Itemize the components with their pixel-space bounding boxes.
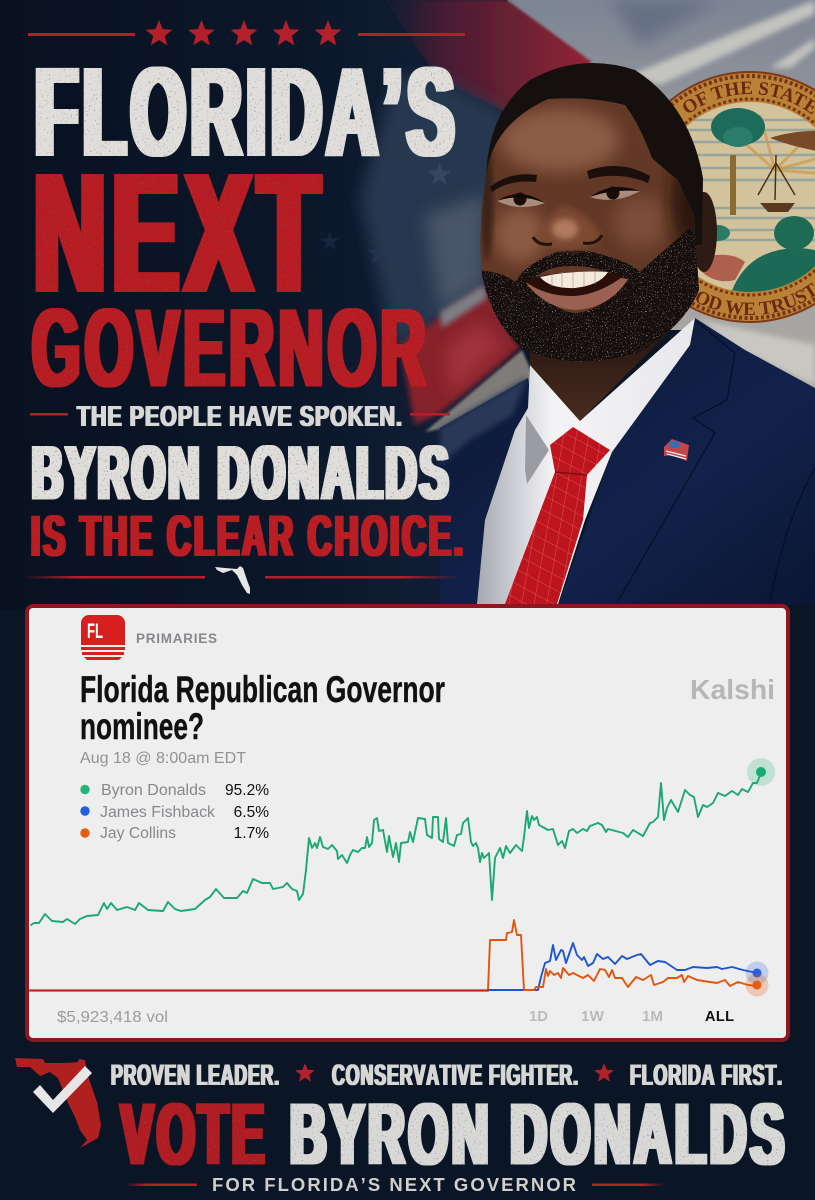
time range tabs [529,1009,734,1025]
top rule with five stars [28,20,465,45]
divider with Florida icon [22,566,460,594]
left jacket highlight [440,377,528,465]
collar left shadow [525,415,549,484]
decorative faint stars in navy field [318,156,454,271]
subhead with flanking rules: THE PEOPLE HAVE SPOKEN. [77,401,403,433]
vote headline: VOTE [121,1086,268,1183]
decorative faint stars in navy field: ★ [425,156,454,192]
series: James Fishback [488,943,757,990]
beard [482,227,699,362]
headline [31,42,466,569]
necktie [505,427,610,604]
slogan row: PROVEN LEADER. [111,1059,280,1092]
slogan row [111,1059,783,1092]
series: Jay Collins [488,920,757,990]
legend: Jay Collins [100,825,176,842]
seal scene [688,108,815,292]
end marker: Collins [746,974,768,996]
Kalshi wordmark: Kalshi [690,674,775,705]
candidate name: BYRON DONALDS [32,431,452,516]
suit jacket [440,318,815,605]
clear choice line: IS THE CLEAR CHOICE. [31,504,466,569]
decorative faint stars in navy field: ★ [318,226,341,256]
mouth and teeth [523,272,625,296]
right eyebrow [587,166,650,183]
slogan stars [295,1063,614,1082]
headline: FLORIDA'S: FLORIDA’S [35,42,459,182]
ear [691,192,717,272]
market card [27,606,788,1040]
legend: Byron Donalds [101,782,206,799]
time range tabs: 1W [581,1009,604,1025]
market title [80,669,445,747]
flag pin [664,439,689,461]
nose [535,205,602,250]
decorative faint stars in navy field: ★ [365,235,394,271]
neck [530,300,675,421]
logo: FL badge [81,615,125,660]
market title: nominee? [80,706,204,747]
market title: Florida Republican Governor [80,669,445,710]
volume: $5,923,418 vol [57,1009,168,1026]
end marker: Fishback [746,962,768,984]
baseline flat segment [30,989,488,992]
time range tabs: 1M [642,1009,663,1025]
state seal of Florida [669,71,815,323]
series: Byron Donalds [31,773,761,925]
legend [80,782,269,842]
lapel edge [617,320,815,603]
legend: 1.7% [234,825,269,842]
footer tagline: FOR FLORIDA’S NEXT GOVERNOR [212,1174,576,1195]
time range tabs: 1D [529,1009,548,1025]
candidate portrait [440,63,815,605]
face skin [480,98,699,362]
left eyebrow [490,174,537,192]
bottom banner [15,1058,788,1195]
line chart [30,758,775,996]
slogan row: CONSERVATIVE FIGHTER. [332,1059,579,1092]
headline: NEXT: NEXT [34,138,326,328]
shirt [477,318,695,604]
legend: James Fishback [100,804,215,821]
legend: 6.5% [234,804,269,821]
lower lip [526,276,628,310]
date: Aug 18 @ 8:00am EDT [80,750,246,767]
headline: GOVERNOR: GOVERNOR [32,287,430,410]
end marker: Donalds [747,758,775,786]
right eye [590,186,640,200]
icon: Florida map with checkmark [15,1058,101,1148]
legend: 95.2% [225,782,269,799]
logo: FL badge: FL [87,620,103,643]
category label: PRIMARIES [136,631,217,646]
left eye [497,192,545,207]
time range tabs: ALL [705,1009,734,1025]
card frame [27,606,788,1040]
hair [486,63,703,245]
